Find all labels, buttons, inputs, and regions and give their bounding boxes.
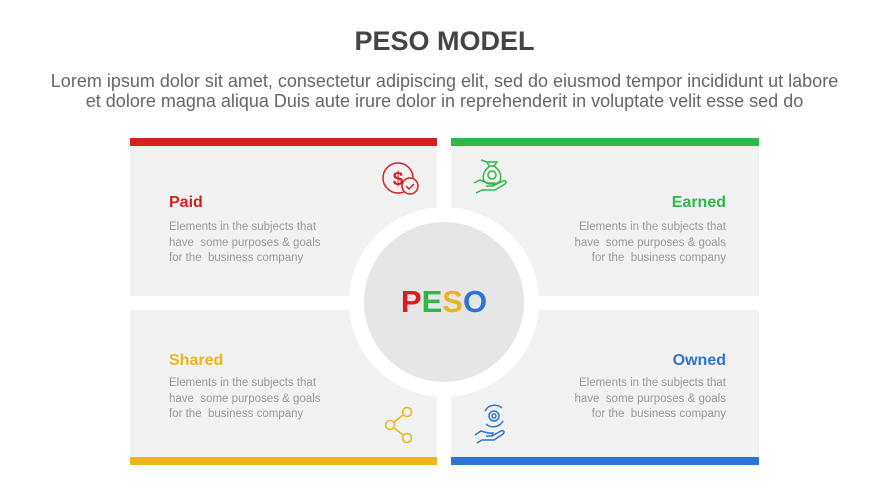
text: shared: for the business company [169, 408, 303, 420]
text: owned: Elements in the subjects that [579, 377, 726, 389]
text: owned: for the business company [592, 408, 726, 420]
text: owned: have some purposes & goals [574, 392, 726, 404]
subtitle: et dolore magna aliqua Duis aute irure dolor in reprehenderit in voluptate velit esse sed do [86, 90, 803, 110]
text: earned: for the business company [592, 252, 726, 264]
icon: dollar check: $ [393, 169, 404, 190]
text: paid: have some purposes & goals [169, 236, 321, 248]
center circle: PESO [401, 284, 487, 319]
text: earned [574, 221, 726, 264]
text: earned: have some purposes & goals [574, 236, 726, 248]
panel: shared [130, 310, 437, 465]
panel: paid [130, 138, 437, 296]
heading: owned: Owned [673, 352, 726, 369]
icon: share [384, 406, 412, 443]
heading: shared: Shared [169, 352, 223, 369]
icon: money bag hand [474, 159, 507, 194]
icon: dollar check [382, 162, 419, 195]
text: shared: have some purposes & goals [169, 392, 321, 404]
text: earned: Elements in the subjects that [579, 221, 726, 233]
text: paid [169, 221, 321, 264]
panel: owned [451, 310, 759, 465]
text: owned [574, 377, 726, 420]
title: PESO MODEL [354, 26, 535, 56]
icon: gear hand [474, 404, 505, 444]
subtitle: Lorem ipsum dolor sit amet, consectetur adipiscing elit, sed do eiusmod tempor incididunt ut labore [51, 71, 838, 91]
text: paid: Elements in the subjects that [169, 221, 316, 233]
text: shared [169, 377, 321, 420]
heading: earned: Earned [672, 194, 726, 211]
text: shared: Elements in the subjects that [169, 377, 316, 389]
subtitle [51, 71, 838, 111]
text: paid: for the business company [169, 252, 303, 264]
heading: paid: Paid [169, 194, 203, 211]
panel: earned [451, 138, 759, 296]
center circle [349, 207, 539, 397]
